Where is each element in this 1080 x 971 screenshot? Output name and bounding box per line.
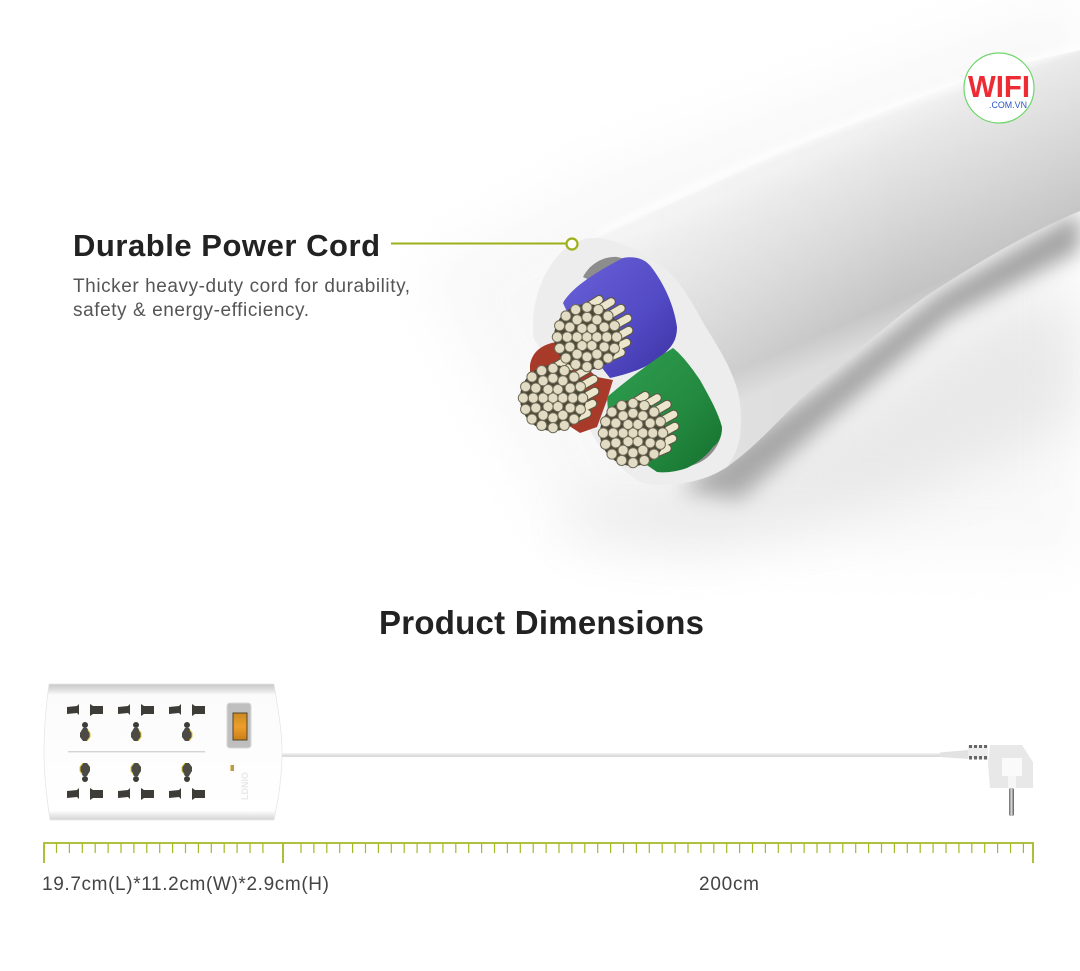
cable illustration [420, 0, 1080, 560]
cable end cap [533, 238, 741, 485]
power cord [282, 750, 968, 759]
text block: cord description: Thicker heavy-duty cord for durability, [73, 276, 410, 297]
blue core [552, 257, 677, 378]
cable body [597, 50, 1080, 467]
cable highlight band [600, 42, 1080, 236]
outlets bottom row [67, 763, 205, 800]
green core [598, 348, 722, 472]
plug [968, 745, 1033, 816]
logo: WIFI.COM.VN: .COM.VN [989, 100, 1027, 110]
cavity bottom [660, 427, 722, 470]
dimension label: cord length: 200cm [699, 874, 759, 895]
rocker switch [227, 703, 251, 748]
text block: cord description: safety & energy-efficiency. [73, 300, 309, 321]
power strip [44, 684, 282, 820]
text block: cord description [73, 276, 410, 321]
brand mark: LDNIO [240, 772, 250, 800]
callout leader line [391, 238, 578, 250]
heading: Durable Power Cord: Durable Power Cord [73, 228, 380, 263]
dimension label: strip size: 19.7cm(L)*11.2cm(W)*2.9cm(H) [42, 874, 329, 895]
divider [68, 751, 205, 752]
cavity top [583, 257, 640, 285]
heading: Product Dimensions: Product Dimensions [379, 604, 704, 641]
ruler [44, 843, 1033, 863]
background shading around cable [420, 0, 1080, 560]
cable shadow [680, 211, 1080, 500]
logo: WIFI.COM.VN: WIFI [968, 69, 1030, 104]
outlets top row [67, 704, 205, 741]
logo: WIFI.COM.VN [964, 53, 1034, 123]
indicator LED [230, 765, 234, 771]
cable soft shadow [560, 300, 1080, 550]
red core [518, 342, 613, 433]
